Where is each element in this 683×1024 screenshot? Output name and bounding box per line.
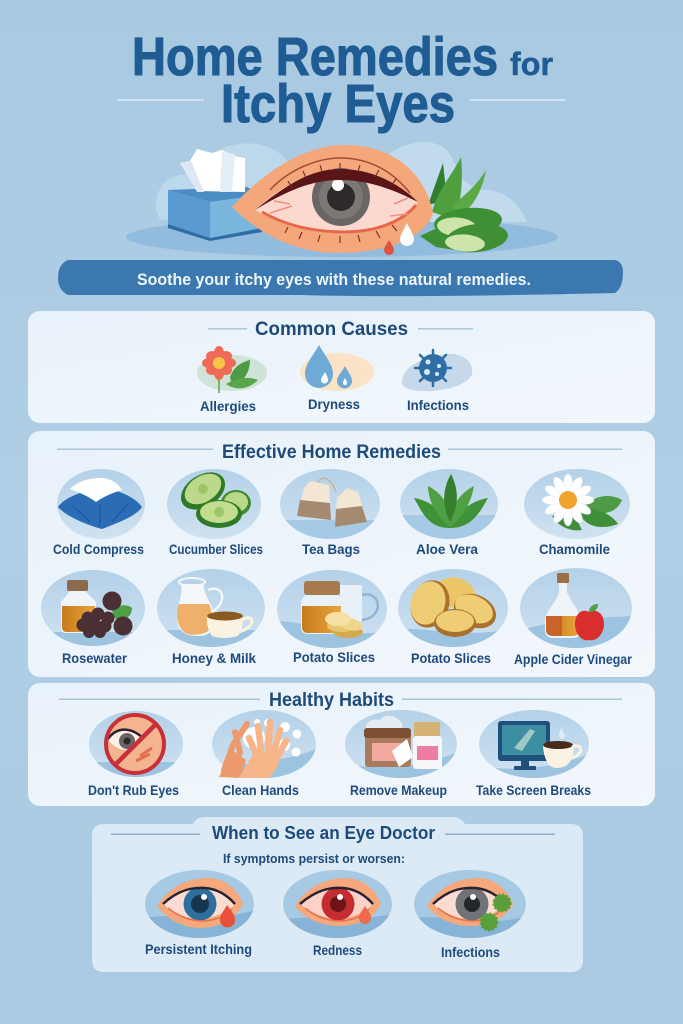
- label: cucumber slices: Cucumber Slices: [169, 541, 263, 557]
- label: aloe vera: Aloe Vera: [416, 541, 478, 557]
- symptom: redness: [283, 870, 393, 958]
- panel: healthy habits: [28, 683, 655, 806]
- remedy: potato slices: [277, 570, 390, 665]
- heading: healthy habits: Healthy Habits: [269, 690, 394, 711]
- label: clean hands: Clean Hands: [222, 782, 299, 798]
- heading: common causes: Common Causes: [255, 319, 408, 340]
- title: for: [510, 46, 553, 82]
- label: infections: Infections: [407, 397, 469, 413]
- hero illustration: [126, 142, 558, 257]
- label: potato slices 2: Potato Slices: [411, 650, 491, 666]
- symptom: infections: [414, 870, 526, 960]
- label: potato slices: Potato Slices: [293, 649, 375, 665]
- heading: when to see an eye doctor: When to See an Eye Doctor: [212, 823, 435, 843]
- label: chamomile: Chamomile: [539, 541, 610, 557]
- remedy: cold compress: [53, 469, 145, 557]
- label: allergies: Allergies: [200, 398, 256, 414]
- label: infections: Infections: [441, 944, 500, 960]
- habit: clean hands: [210, 710, 318, 798]
- label: apple cider vinegar: Apple Cider Vinegar: [514, 651, 632, 667]
- label: rosewater: Rosewater: [62, 650, 128, 666]
- label: don't rub eyes: Don't Rub Eyes: [88, 782, 179, 798]
- remedy: tea bags: [278, 469, 382, 557]
- icon: allergies: [197, 346, 267, 393]
- icon: tissue box: [168, 149, 262, 241]
- habit: don't rub eyes: [88, 711, 184, 798]
- habit: remove makeup: [344, 710, 458, 798]
- panel: when to see an eye doctor: [92, 817, 583, 972]
- panel: effective home remedies: [28, 431, 655, 677]
- label: cold compress: Cold Compress: [53, 541, 144, 557]
- remedy: chamomile: [524, 469, 630, 557]
- remedy: cucumber slices: [167, 465, 263, 557]
- remedy: honey and milk: [156, 569, 266, 666]
- banner: [58, 260, 623, 296]
- label: tea bags: Tea Bags: [302, 541, 360, 557]
- title: [117, 27, 566, 134]
- icon: infections: [402, 350, 472, 391]
- label: redness: Redness: [313, 942, 362, 958]
- label: honey and milk: Honey & Milk: [172, 650, 256, 666]
- remedy: aloe vera: [400, 469, 498, 557]
- panel: common causes: [28, 311, 655, 423]
- icon: dryness: [300, 345, 374, 391]
- title: Itchy Eyes: [221, 74, 455, 134]
- label: dryness: Dryness: [308, 396, 360, 412]
- title: Home Remedies: [132, 27, 498, 87]
- label: remove makeup: Remove Makeup: [350, 782, 447, 798]
- banner: Soothe your itchy eyes with these natural remedies.: [137, 271, 531, 289]
- symptom: persistent itching: [145, 870, 255, 957]
- subheading: If symptoms persist or worsen:: [223, 851, 405, 866]
- remedy: potato slices 2: [398, 569, 510, 666]
- label: persistent itching: Persistent Itching: [145, 941, 252, 957]
- heading: effective home remedies: Effective Home Remedies: [222, 442, 441, 463]
- habit: take screen breaks: [476, 710, 592, 798]
- remedy: apple cider vinegar: [514, 568, 634, 667]
- remedy: rosewater: [40, 570, 146, 666]
- label: take screen breaks: Take Screen Breaks: [476, 782, 591, 798]
- icon: aloe vera: [420, 157, 509, 255]
- icon: red itchy eye: [232, 145, 433, 255]
